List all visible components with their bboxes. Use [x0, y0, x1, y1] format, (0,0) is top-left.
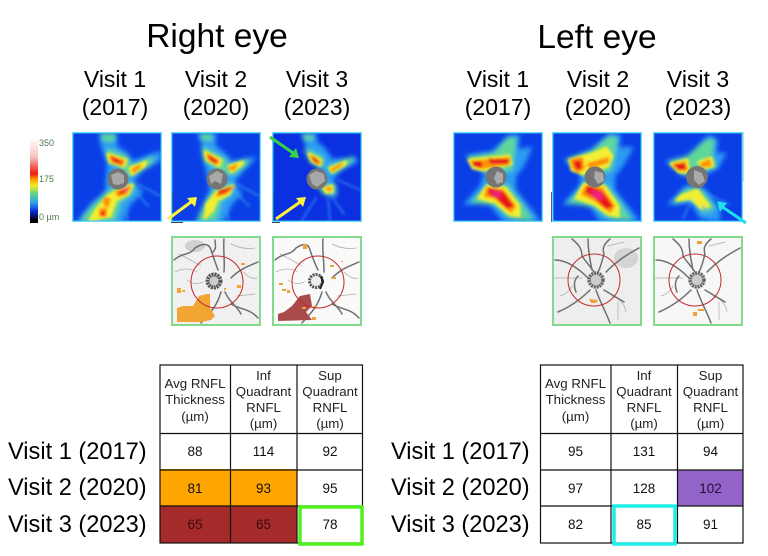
table: left eye RNFL: Thickness [546, 392, 606, 407]
row labels: right table [8, 439, 147, 538]
table: right eye RNFL: 93 [256, 481, 271, 496]
table: left eye RNFL: Quadrant [683, 384, 739, 399]
table: left eye RNFL: Avg RNFL [545, 376, 606, 391]
visit headers: right eye: (2023) [284, 94, 350, 120]
arrow: green [270, 137, 299, 158]
orange defect [177, 294, 215, 322]
table: left eye RNFL: Sup [699, 368, 722, 383]
visit headers: left eye: Visit 1 [467, 66, 529, 92]
visit headers: left eye: (2023) [665, 94, 731, 120]
visit headers: left eye [465, 66, 731, 120]
visit headers: right eye: (2017) [82, 94, 148, 120]
table: right eye RNFL: Sup [318, 368, 342, 383]
table: left eye RNFL: (µm) [697, 416, 724, 431]
visit headers: left eye: Visit 2 [567, 66, 629, 92]
visit headers: right eye: Visit 3 [286, 66, 348, 92]
table: right eye RNFL: 65 [256, 517, 271, 532]
visit headers: left eye: (2020) [565, 94, 631, 120]
visit headers: right eye [82, 66, 350, 120]
highlight: green cell [300, 507, 362, 544]
table: left eye RNFL: 85 [636, 517, 652, 532]
red-brown defect [278, 294, 312, 321]
heatmap: left eye visit 3 [653, 132, 746, 223]
visit headers: right eye: (2020) [183, 94, 249, 120]
heatmap: right eye visit 2 [168, 132, 261, 222]
visit headers: right eye: Visit 2 [185, 66, 247, 92]
table: left eye RNFL [540, 365, 744, 544]
row labels: right table: Visit 1 (2017) [8, 439, 147, 465]
fundus: left eye visit 3 [653, 236, 743, 326]
table: right eye RNFL: (µm) [316, 416, 344, 431]
row labels: left table: Visit 3 (2023) [391, 512, 530, 538]
table: left eye RNFL: 97 [568, 481, 583, 496]
table: right eye RNFL: 65 [187, 517, 203, 532]
table: right eye RNFL: 95 [322, 481, 338, 496]
visit headers: right eye: Visit 1 [84, 66, 146, 92]
heatmap: right eye visit 3 [270, 132, 362, 222]
table: right eye RNFL: Thickness [165, 392, 225, 407]
fundus: right eye visit 2 [171, 236, 261, 326]
table: left eye RNFL: 131 [633, 444, 655, 459]
table: right eye RNFL: 88 [187, 444, 203, 459]
table: right eye RNFL: Avg RNFL [164, 376, 226, 391]
heatmap: left eye visit 2 [552, 132, 642, 222]
colour scale legend: 0 µm [39, 212, 59, 222]
table: left eye RNFL: RNFL [627, 400, 661, 415]
colour scale legend: 350 [39, 138, 54, 148]
table: left eye RNFL: 94 [703, 444, 718, 459]
table: left eye RNFL: 102 [699, 481, 722, 496]
colour scale legend: 175 [39, 174, 54, 184]
table: right eye RNFL: RNFL [313, 400, 347, 415]
table: right eye RNFL: Inf [256, 368, 271, 383]
table: left eye RNFL: RNFL [693, 400, 728, 415]
arrow: cyan [717, 201, 746, 223]
table: left eye RNFL: 91 [703, 517, 718, 532]
table: right eye RNFL: RNFL [246, 400, 281, 415]
table: right eye RNFL: Quadrant [236, 384, 292, 399]
table: left eye RNFL: 128 [633, 481, 655, 496]
visit headers: left eye: Visit 3 [667, 66, 729, 92]
table: left eye RNFL: Inf [637, 368, 652, 383]
table: left eye RNFL: 82 [568, 517, 583, 532]
row labels: right table: Visit 2 (2020) [8, 475, 147, 501]
title: left eye: Left eye [537, 19, 657, 56]
row labels: left table [391, 439, 530, 538]
arrow: yellow [276, 197, 306, 219]
table: right eye RNFL [160, 365, 362, 544]
title: right eye: Right eye [146, 18, 288, 55]
highlight: cyan cell [614, 506, 675, 544]
colour scale legend [30, 138, 59, 223]
arrow: yellow [168, 197, 197, 219]
fundus: left eye visit 2 [552, 236, 642, 326]
table: left eye RNFL: (µm) [562, 409, 589, 424]
row labels: right table: Visit 3 (2023) [8, 512, 147, 538]
table: right eye RNFL: (µm) [181, 409, 209, 424]
table: right eye RNFL: 92 [322, 444, 338, 459]
table: left eye RNFL: 95 [568, 444, 583, 459]
row labels: left table: Visit 2 (2020) [391, 475, 530, 501]
heatmap: left eye visit 1 [453, 132, 543, 222]
visit headers: left eye: (2017) [465, 94, 531, 120]
fundus: right eye visit 3 [272, 236, 362, 326]
table: right eye RNFL: Quadrant [302, 384, 358, 399]
table: right eye RNFL: 114 [253, 444, 275, 459]
heatmap: right eye visit 1 [72, 132, 162, 222]
table: right eye RNFL: 78 [322, 517, 338, 532]
table: left eye RNFL: Quadrant [616, 384, 672, 399]
table: left eye RNFL: (µm) [630, 416, 658, 431]
table: right eye RNFL: 81 [187, 481, 203, 496]
table: right eye RNFL: (µm) [250, 416, 277, 431]
row labels: left table: Visit 1 (2017) [391, 439, 530, 465]
